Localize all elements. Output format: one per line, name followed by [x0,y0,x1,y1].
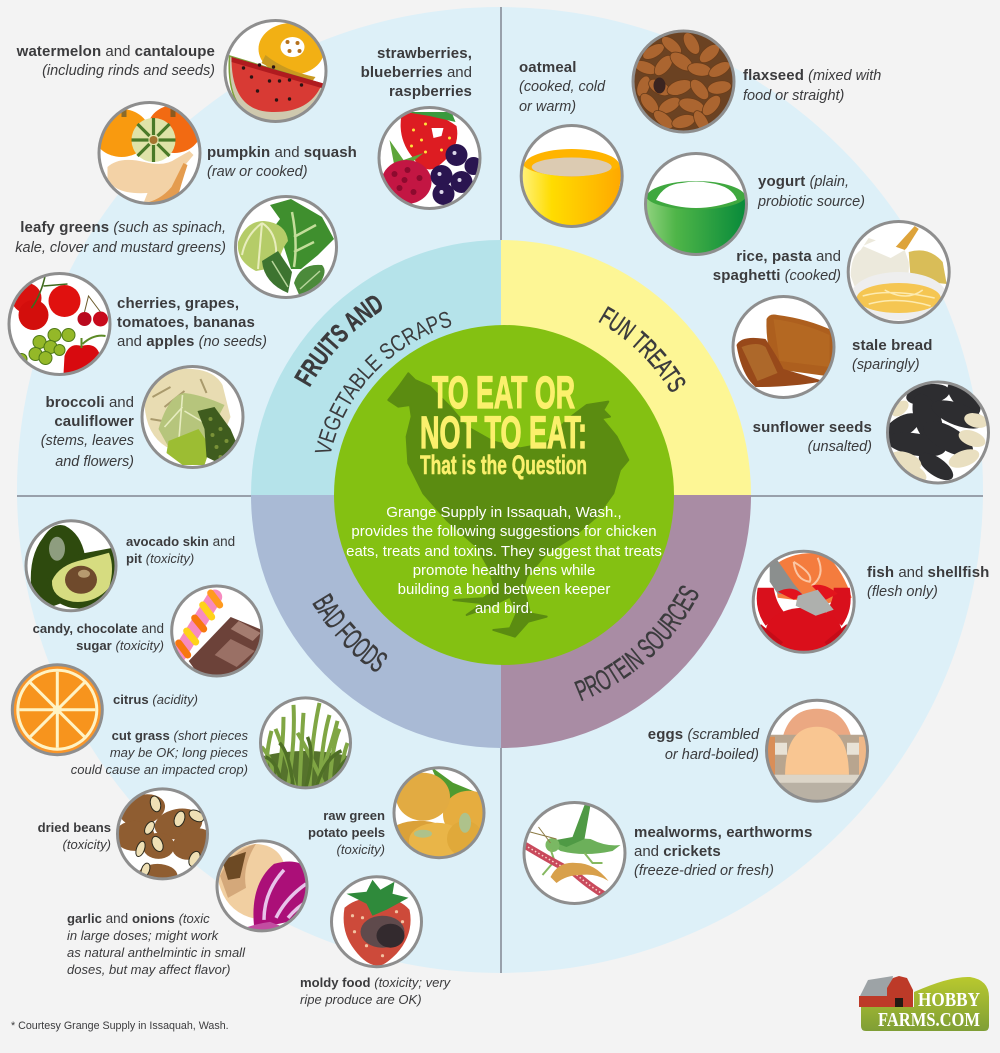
label: pumpkin [207,144,357,180]
label: moldy: moldy food (toxicity; very [300,975,450,990]
label: sunflower: sunflower seeds [753,419,872,436]
icon: citrus [12,665,102,755]
label: leafy greens: leafy greens (such as spinach, [20,219,226,236]
icon: rice pasta spaghetti [848,222,949,322]
icon: eggs in carton [766,700,868,803]
label: dried beans: (toxicity) [63,837,111,852]
label: cherries [117,295,267,350]
segment: fruits and vegetable scraps [251,240,501,495]
icon: watermelon and cantaloupe [225,20,326,122]
label: stale bread [852,337,933,373]
icon: moldy strawberry [332,877,422,967]
label: broccoli: broccoli and [45,394,134,411]
label: citrus: citrus (acidity) [113,692,198,707]
label: garlic [67,911,246,977]
label: leafy greens [15,219,226,256]
center body text: promote healthy hens while [413,562,595,579]
label: oatmeal: (cooked, cold [519,79,605,95]
icon: pumpkin and squash [94,102,202,205]
label: pumpkin: pumpkin and squash [207,144,357,161]
label: watermelon [16,43,215,79]
label: rice [713,248,841,284]
label: broccoli: (stems, leaves [41,433,134,449]
chicken silhouette [388,373,628,637]
label: avocado [126,534,235,566]
label: sunflower: (unsalted) [808,439,872,455]
title: NOT TO EAT: [420,407,587,458]
ring label: fruits and: FRUITS AND [294,296,382,387]
center body text [346,504,662,617]
segment: bad foods [251,495,501,748]
label: strawberries: raspberries [389,83,472,100]
icon: strawberries blueberries raspberries [379,108,482,208]
label: mealworms: mealworms, earthworms [634,824,812,841]
label: avocado: pit (toxicity) [126,551,194,566]
segment: protein sources [501,495,751,748]
label: fish [867,564,989,600]
label: broccoli: and flowers) [55,454,134,470]
label: candy: sugar (toxicity) [76,638,164,653]
center body text: eats, treats and toxins. They suggest that treats [346,543,662,560]
label: candy [33,621,164,653]
label: strawberries: blueberries and [361,64,472,81]
label: fish: (flesh only) [867,584,938,600]
label: candy: candy, chocolate and [33,621,164,636]
label: fish: fish and shellfish [867,564,989,581]
icon: raw green potato [392,766,486,860]
label: pumpkin: (raw or cooked) [207,164,308,180]
label: potato: potato peels [308,825,385,840]
icon: cut grass [260,698,352,789]
label: stale bread: stale bread [852,337,933,354]
label: garlic: doses, but may affect flavor) [67,962,230,977]
label: mealworms [634,824,812,879]
label: potato: raw green [323,808,385,823]
label: dried beans: dried beans [38,820,111,835]
center body text: provides the following suggestions for chicken [351,523,657,540]
center body text: building a bond between keeper [398,581,610,598]
label: potato [308,808,385,857]
label: stale bread: (sparingly) [852,357,920,373]
label: yogurt: probiotic source) [758,194,865,210]
icon: dried beans [116,787,209,880]
label: watermelon: (including rinds and seeds) [42,63,215,79]
icon: stale bread [733,296,834,398]
label: moldy [300,975,451,1007]
center green circle [334,325,674,665]
title [420,367,587,480]
logo: hobby farms: FARMS.COM [878,1009,980,1031]
label: cut grass: could cause an impacted crop) [71,762,248,777]
icon: garlic and onion [217,841,310,934]
segment: fun treats [501,240,751,495]
label: rice: spaghetti (cooked) [713,267,841,284]
logo: hobby farms [859,976,989,1031]
label: broccoli: cauliflower [54,413,134,430]
icon: sunflower seeds [880,377,989,485]
icon: tomatoes cherries grapes apple [9,274,110,376]
icon: avocado [26,521,117,611]
logo: hobby farms: HOBBY [918,989,980,1011]
label: broccoli [41,394,134,470]
icon: flaxseed [632,30,734,135]
label: strawberries [361,45,472,100]
label: garlic: in large doses; might work [67,928,218,943]
title: That is the Question [420,450,587,480]
label: eggs [648,726,760,763]
label: cherries: cherries, grapes, [117,295,239,312]
icon: leafy greens [236,196,336,298]
label: rice: rice, pasta and [736,248,841,265]
label: flaxseed: food or straight) [743,88,844,104]
icon: mealworms earthworms crickets [524,802,625,904]
ring label: vegetable scraps: VEGETABLE SCRAPS [314,312,452,452]
label: watermelon: watermelon and cantaloupe [17,43,215,60]
label: flaxseed [743,67,881,104]
label: cut grass [71,728,248,777]
label: yogurt [758,173,865,210]
label: cherries: tomatoes, bananas [117,314,255,331]
label: cherries: and apples (no seeds) [117,333,267,350]
label: mealworms: and crickets [634,843,721,860]
ring label: fun treats: FUN TREATS [598,306,686,392]
label: mealworms: (freeze-dried or fresh) [634,863,774,879]
ring label: protein sources: PROTEIN SOURCES [574,586,698,701]
icon: fish and shellfish [753,551,854,656]
label: garlic: as natural anthelmintic in small [67,945,245,960]
label: yogurt: yogurt (plain, [758,173,849,190]
label: sunflower [753,419,872,455]
label: strawberries: strawberries, [377,45,472,62]
label: cut grass: cut grass (short pieces [112,728,248,743]
label: eggs: or hard-boiled) [665,747,759,763]
icon: yogurt bowl [646,154,746,256]
label: avocado: avocado skin and [126,534,235,549]
label: dried beans [38,820,111,852]
icon: candy and chocolate [172,586,265,677]
label: garlic: garlic and onions (toxic [67,911,210,926]
footnote: * Courtesy Grange Supply in Issaquah, Wash. [11,1020,229,1032]
icon: oatmeal bowl [521,126,622,228]
label: cut grass: may be OK; long pieces [110,745,248,760]
center body text: Grange Supply in Issaquah, Wash., [386,504,622,521]
ring label: bad foods: BAD FOODS [312,592,388,672]
label: oatmeal: oatmeal [519,59,577,76]
title: TO EAT OR [432,367,575,418]
label: moldy: ripe produce are OK) [300,992,422,1007]
label: flaxseed: flaxseed (mixed with [743,67,881,84]
label: oatmeal: or warm) [519,99,576,115]
label: eggs: eggs (scrambled [648,726,759,743]
center body text: and bird. [475,600,533,617]
label: potato: (toxicity) [337,842,385,857]
icon: broccoli and cauliflower [142,366,243,468]
label: leafy greens: kale, clover and mustard greens) [15,240,226,256]
label: oatmeal [519,59,606,115]
